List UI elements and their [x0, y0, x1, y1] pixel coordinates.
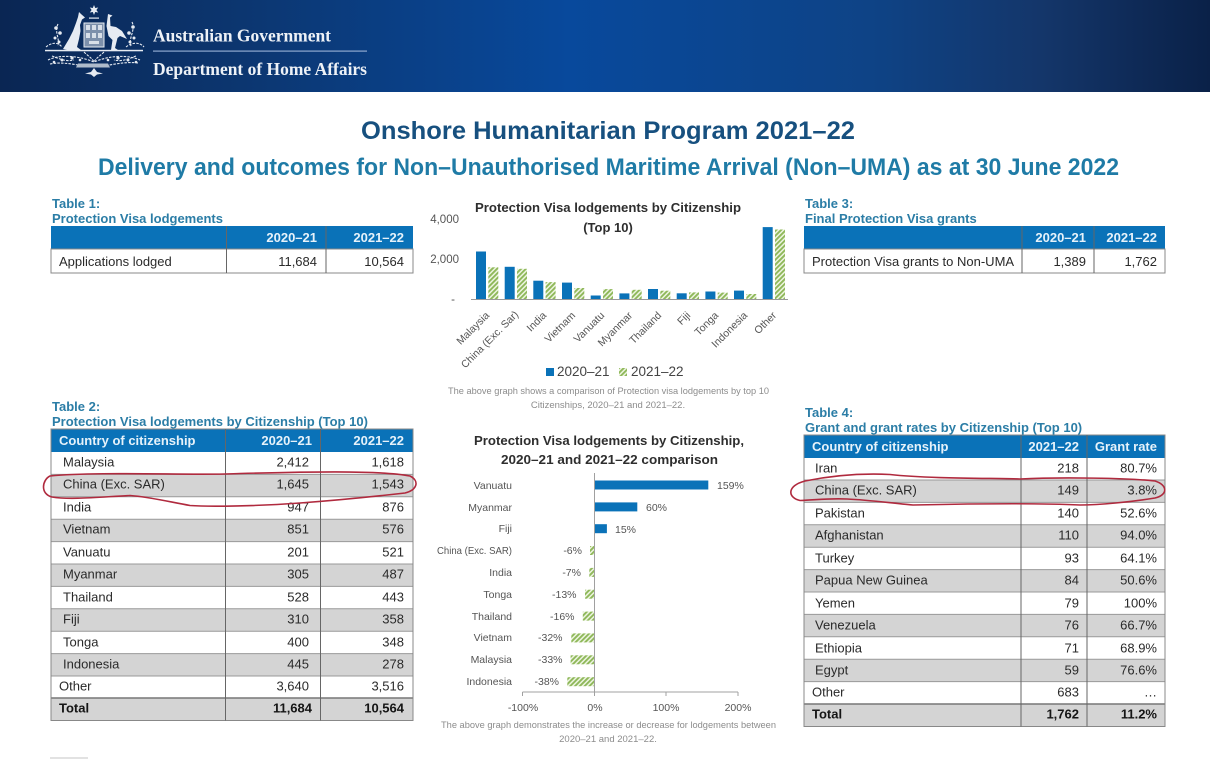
chart: percentage change in lodgements: 159% [717, 480, 744, 492]
title: Onshore Humanitarian Program 2021–22 [361, 117, 855, 145]
chart: percentage change in lodgements: Malaysia [471, 654, 512, 666]
table 1: Protection Visa lodgements: 2021–22 [353, 230, 404, 245]
table 4: grants and grant rates: Egypt [815, 662, 849, 677]
table 4: grants and grant rates: Papua New Guinea [815, 572, 929, 587]
table 4: grants and grant rates: 93 [1065, 550, 1079, 565]
bar chart: lodgements by citizenship: 2,000 [430, 254, 459, 266]
table 2: lodgements by citizenship: Tonga [63, 634, 99, 649]
chart: percentage change in lodgements: -6% [563, 545, 582, 557]
chart: percentage change in lodgements: 0% [587, 702, 603, 714]
bar chart: lodgements by citizenship: Thailand [627, 310, 664, 347]
table 4: grants and grant rates: 11.2% [1121, 706, 1157, 721]
table 4: grants and grant rates: Other [812, 684, 845, 699]
icon: Australian coat of arms [45, 5, 144, 77]
table 4: grants and grant rates: 64.1% [1120, 550, 1157, 565]
table 3: final Protection Visa grants [804, 196, 1165, 273]
table 4: grants and grant rates: Yemen [815, 595, 855, 610]
table 4: grants and grant rates: 76 [1065, 617, 1079, 632]
callout: red hand-drawn circle around China, table 2 [44, 472, 416, 506]
table 2: lodgements by citizenship: 310 [287, 611, 309, 626]
table 2: lodgements by citizenship: 348 [382, 634, 404, 649]
bar chart: lodgements by citizenship: Tonga [692, 310, 721, 338]
table 4: grants and grant rates: 59 [1065, 662, 1079, 677]
table 2: lodgements by citizenship: 11,684 [273, 700, 313, 715]
table 3: final Protection Visa grants: 2021–22 [1106, 230, 1157, 245]
table 4: grants and grant rates: 149 [1057, 482, 1079, 497]
chart: percentage change in lodgements: Fiji [499, 523, 512, 535]
table 2: lodgements by citizenship: 3,640 [276, 678, 309, 693]
table 2: lodgements by citizenship: Thailand [63, 589, 113, 604]
bar chart: lodgements by citizenship: Malaysia [454, 310, 492, 347]
agency name: Department of Home Affairs [153, 59, 367, 79]
table 4: grants and grant rates: 110 [1058, 527, 1079, 542]
header banner [0, 0, 1210, 92]
table 4: grants and grant rates: 3.8% [1127, 482, 1157, 497]
table 3: final Protection Visa grants: Protection Visa grants to Non-UMA [812, 254, 1014, 269]
table 4: grants and grant rates: 50.6% [1120, 572, 1157, 587]
table 4: grants and grant rates: Country of citizenship [812, 439, 949, 454]
table 2: lodgements by citizenship [51, 399, 413, 720]
table 2: lodgements by citizenship: 278 [382, 656, 404, 671]
caption: chart 1: Citizenships, 2020–21 and 2021–22. [531, 400, 685, 411]
bar chart: lodgements by citizenship: Other [752, 309, 779, 337]
bar chart: lodgements by citizenship: Vietnam [543, 309, 578, 345]
table 4: grants and grant rates: 80.7% [1120, 460, 1157, 475]
caption: chart 2: 2020–21 and 2021–22. [559, 734, 657, 745]
table 2: lodgements by citizenship: 876 [382, 499, 404, 514]
table 2: lodgements by citizenship: 2021–22 [353, 433, 404, 448]
table 4: grants and grant rates: Afghanistan [815, 527, 884, 542]
table 2: lodgements by citizenship: India [63, 499, 92, 514]
caption: chart 2: The above graph demonstrates the increase or decrease for lodgements between [441, 720, 776, 731]
table 2: lodgements by citizenship: 576 [382, 521, 404, 536]
table 3: final Protection Visa grants: 1,762 [1124, 254, 1157, 269]
table 4: grants and grant rates: China (Exc. SAR) [815, 482, 917, 497]
table 4: grants and grant rates: Total [812, 706, 842, 721]
table 2: lodgements by citizenship: 947 [287, 499, 309, 514]
agency name [153, 26, 367, 79]
bar chart: lodgements by citizenship: China (Exc. Sar) [459, 309, 521, 371]
chart: percentage change in lodgements: -16% [550, 611, 574, 623]
table 4: grants and grant rates: 100% [1124, 595, 1157, 610]
chart: percentage change in lodgements: 200% [725, 702, 751, 714]
table 3: final Protection Visa grants: 2020–21 [1035, 230, 1086, 245]
table 2: lodgements by citizenship: 358 [382, 611, 404, 626]
table 4: grants and grant rates: 76.6% [1120, 662, 1157, 677]
table 4: grants and grant rates: 79 [1065, 595, 1079, 610]
chart: percentage change in lodgements: 60% [646, 502, 667, 514]
table 2: lodgements by citizenship: 3,516 [371, 678, 404, 693]
table 4: grants and grant rates: 84 [1065, 572, 1079, 587]
table 2: lodgements by citizenship: 445 [287, 656, 309, 671]
table 2: lodgements by citizenship: Table 2: [52, 399, 100, 414]
table 4: grants and grant rates: 218 [1057, 460, 1079, 475]
table 2: lodgements by citizenship: Myanmar [63, 566, 118, 581]
table 4: grants and grant rates: Grant and grant rates by Citizenship (Top 10) [805, 420, 1082, 435]
table 4: grants and grant rates: Ethiopia [815, 640, 863, 655]
table 2: lodgements by citizenship: Country of citizenship [59, 433, 196, 448]
chart: percentage change in lodgements: -33% [538, 654, 562, 666]
table 4: grants and grant rates: Iran [815, 460, 837, 475]
bar chart: lodgements by citizenship: India [525, 310, 549, 334]
chart: percentage change in lodgements: -32% [538, 632, 562, 644]
table 4: grants and grant rates [804, 405, 1165, 726]
table 2: lodgements by citizenship: 10,564 [364, 700, 405, 715]
table 2: lodgements by citizenship: 851 [287, 521, 309, 536]
table 2: lodgements by citizenship: Other [59, 678, 92, 693]
table 2: lodgements by citizenship: Vietnam [63, 521, 110, 536]
table 3: final Protection Visa grants: Table 3: [805, 196, 853, 211]
chart: percentage change in lodgements [437, 433, 751, 714]
chart: percentage change in lodgements: -7% [562, 567, 581, 579]
table 2: lodgements by citizenship: Malaysia [63, 454, 115, 469]
table 3: final Protection Visa grants: Final Protection Visa grants [805, 211, 977, 226]
table 4: grants and grant rates: … [1144, 684, 1157, 699]
bar chart: lodgements by citizenship: 2021–22 [631, 364, 684, 379]
table 2: lodgements by citizenship: Total [59, 700, 89, 715]
table 2: lodgements by citizenship: 1,645 [276, 476, 309, 491]
table 4: grants and grant rates: Pakistan [815, 505, 865, 520]
table 4: grants and grant rates: Turkey [815, 550, 855, 565]
table 2: lodgements by citizenship: 1,543 [371, 476, 404, 491]
chart: percentage change in lodgements: Indonesia [466, 676, 512, 688]
table 3: final Protection Visa grants: 1,389 [1053, 254, 1086, 269]
table 2: lodgements by citizenship: 400 [287, 634, 309, 649]
chart: percentage change in lodgements: Vietnam [474, 632, 512, 644]
table 4: grants and grant rates: 2021–22 [1028, 439, 1079, 454]
table 1: Protection Visa lodgements: Table 1: [52, 196, 100, 211]
chart: percentage change in lodgements: Vanuatu [474, 480, 512, 492]
table 2: lodgements by citizenship: 2020–21 [261, 433, 312, 448]
table 1: Protection Visa lodgements: Protection Visa lodgements [52, 211, 223, 226]
subtitle: Delivery and outcomes for Non–Unauthorised Maritime Arrival (Non–UMA) as at 30 June 2022 [98, 154, 1119, 181]
bar chart: lodgements by citizenship: Protection Visa lodgements by Citizenship [475, 200, 741, 215]
table 2: lodgements by citizenship: 201 [287, 544, 309, 559]
table 2: lodgements by citizenship: Vanuatu [63, 544, 110, 559]
table 1: Protection Visa lodgements: 11,684 [278, 254, 317, 269]
chart: percentage change in lodgements: India [489, 567, 512, 579]
table 2: lodgements by citizenship: 2,412 [276, 454, 309, 469]
chart: percentage change in lodgements: Protection Visa lodgements by Citizenship, [474, 433, 744, 448]
caption: chart 1: The above graph shows a comparison of Protection visa lodgements by top 10 [448, 386, 769, 397]
bar chart: lodgements by citizenship: 4,000 [430, 214, 459, 226]
table 4: grants and grant rates: Table 4: [805, 405, 853, 420]
caption: chart 1 [448, 386, 769, 411]
callout: red hand-drawn circle around China, table 4 [791, 474, 1165, 505]
bar chart: lodgements by citizenship: Myanmar [596, 309, 635, 349]
table 2: lodgements by citizenship: 528 [287, 589, 309, 604]
caption: chart 2 [441, 720, 776, 745]
chart: percentage change in lodgements: -100% [508, 702, 538, 714]
chart: percentage change in lodgements: -38% [534, 676, 559, 688]
chart: percentage change in lodgements: 2020–21 and 2021–22 comparison [501, 452, 718, 467]
table 1: Protection Visa lodgements [51, 196, 413, 273]
table 2: lodgements by citizenship: Fiji [63, 611, 80, 626]
table 1: Protection Visa lodgements: 10,564 [364, 254, 404, 269]
table 4: grants and grant rates: 683 [1057, 684, 1079, 699]
table 4: grants and grant rates: 71 [1065, 640, 1079, 655]
chart: percentage change in lodgements: China (Exc. SAR) [437, 545, 512, 557]
table 4: grants and grant rates: Grant rate [1095, 439, 1157, 454]
bar chart: lodgements by citizenship: - [451, 294, 455, 306]
bar chart: lodgements by citizenship: Fiji [675, 310, 693, 328]
bar chart: lodgements by citizenship: 2020–21 [557, 364, 610, 379]
chart: percentage change in lodgements: Myanmar [468, 502, 512, 514]
table 2: lodgements by citizenship: Protection Visa lodgements by Citizenship (Top 10) [52, 414, 368, 429]
table 4: grants and grant rates: 140 [1057, 505, 1079, 520]
table 4: grants and grant rates: 66.7% [1120, 617, 1157, 632]
table 4: grants and grant rates: 52.6% [1120, 505, 1157, 520]
agency name: Australian Government [153, 26, 331, 46]
table 1: Protection Visa lodgements: 2020–21 [266, 230, 317, 245]
chart: percentage change in lodgements: Tonga [483, 589, 512, 601]
table 4: grants and grant rates: 1,762 [1046, 706, 1079, 721]
bar chart: lodgements by citizenship: Indonesia [709, 310, 750, 350]
table 2: lodgements by citizenship: 1,618 [371, 454, 404, 469]
table 4: grants and grant rates: Venezuela [815, 617, 876, 632]
table 2: lodgements by citizenship: 443 [382, 589, 404, 604]
bar chart: lodgements by citizenship: Vanuatu [572, 310, 607, 345]
table 2: lodgements by citizenship: 487 [382, 566, 404, 581]
table 2: lodgements by citizenship: Indonesia [63, 656, 120, 671]
table 1: Protection Visa lodgements: Applications lodged [59, 254, 172, 269]
chart: percentage change in lodgements: Thailand [472, 611, 512, 623]
chart: percentage change in lodgements: 100% [653, 702, 679, 714]
bar chart: lodgements by citizenship: (Top 10) [583, 220, 633, 235]
table 2: lodgements by citizenship: 521 [382, 544, 404, 559]
chart: percentage change in lodgements: -13% [552, 589, 576, 601]
table 2: lodgements by citizenship: 305 [287, 566, 309, 581]
chart: percentage change in lodgements: 15% [615, 524, 636, 536]
bar chart: lodgements by citizenship [430, 200, 788, 379]
table 4: grants and grant rates: 94.0% [1120, 527, 1157, 542]
table 4: grants and grant rates: 68.9% [1120, 640, 1157, 655]
table 2: lodgements by citizenship: China (Exc. SAR) [63, 476, 165, 491]
